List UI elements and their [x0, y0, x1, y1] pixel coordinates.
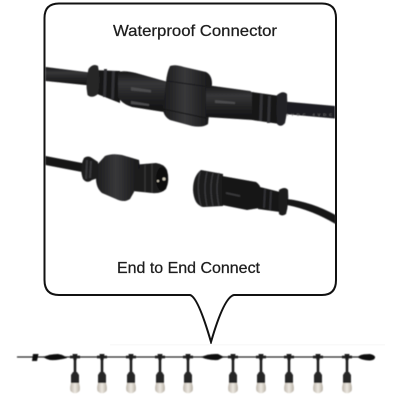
string cable: [17, 356, 375, 358]
callout bubble: [44, 4, 336, 342]
inline connector right: [201, 354, 224, 360]
cable print: 4VDC 4VDC: [286, 112, 332, 117]
bulb 1: [70, 354, 80, 393]
plug nut: [96, 154, 140, 201]
end socket: [358, 354, 375, 360]
inline connector left: [43, 354, 67, 360]
bulb 5: [183, 354, 193, 393]
plug strain relief: [81, 156, 98, 182]
right cable: [284, 102, 335, 118]
bulb 8: [284, 354, 294, 393]
bulb 2: [97, 354, 107, 393]
socket cable: [287, 199, 336, 224]
plug pins: [157, 178, 166, 182]
photo: separated connector: [46, 154, 336, 224]
right body: [206, 85, 254, 120]
plug barrel: [132, 163, 168, 193]
right strain relief: [252, 92, 287, 126]
string lights: [17, 354, 375, 393]
bulb 4: [155, 354, 165, 393]
bulb 6: [228, 354, 238, 393]
heading: waterproof connector: Waterproof Connector: [113, 23, 278, 40]
left cable: [46, 67, 90, 86]
socket strain relief: [258, 187, 280, 212]
left strain relief: [86, 65, 120, 103]
end plug: [32, 354, 38, 361]
socket thread: [193, 170, 223, 207]
caption: end to end connect: End to End Connect: [117, 260, 261, 277]
left body: [118, 71, 168, 112]
photo: joined connector: [46, 65, 335, 127]
plug face: [156, 167, 168, 191]
bulb 10: [342, 354, 352, 393]
plug cable: [46, 156, 82, 172]
socket body: [222, 176, 260, 210]
coupling nut: [163, 65, 212, 127]
bulb 9: [313, 354, 323, 393]
bulb 3: [126, 354, 136, 393]
bulb 7: [256, 354, 266, 393]
